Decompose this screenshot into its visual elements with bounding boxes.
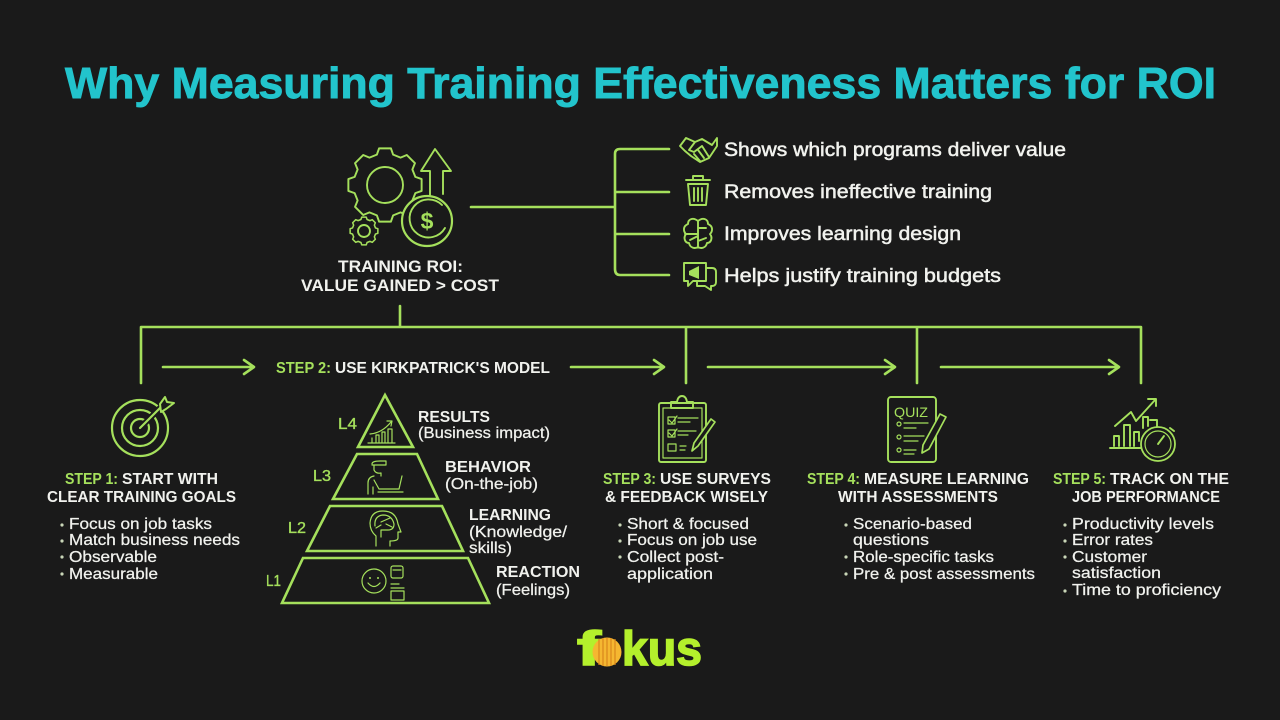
bullet list: Short & focused bbox=[627, 516, 749, 533]
heading: TRACK ON THE bbox=[1110, 471, 1229, 488]
bullet list: Productivity levels bbox=[1072, 516, 1214, 533]
benefit: programs deliver value: Shows which programs deliver value bbox=[724, 140, 1066, 161]
level 2: learning: (Knowledge/ bbox=[469, 524, 568, 541]
level 1: reaction bbox=[266, 558, 580, 603]
panel: step 4 bbox=[807, 397, 1035, 583]
level 2: learning: skills) bbox=[469, 540, 512, 557]
heading: USE SURVEYS bbox=[660, 471, 771, 488]
level 3: behavior: (On-the-job) bbox=[445, 476, 538, 493]
arrow: step 3 to step 4 bbox=[708, 360, 895, 374]
heading: STEP 5: bbox=[1053, 471, 1106, 488]
level 1: reaction: REACTION bbox=[496, 564, 580, 581]
panel: step 5 bbox=[1053, 399, 1229, 599]
heading: WITH ASSESSMENTS bbox=[838, 489, 998, 506]
benefit: justify budgets: Helps justify training budgets bbox=[724, 266, 1001, 287]
bullet list: application bbox=[627, 566, 713, 583]
bullet list: Error rates bbox=[1072, 532, 1153, 549]
bullet list: Scenario-based bbox=[853, 516, 972, 533]
benefit: learning design: Improves learning design bbox=[724, 224, 961, 245]
benefit: removes training bbox=[686, 176, 992, 205]
step 2 heading: USE KIRKPATRICK'S MODEL bbox=[335, 360, 550, 377]
connector: steps bus bbox=[141, 306, 1141, 383]
ROI label: TRAINING ROI: bbox=[338, 257, 463, 276]
arrow: step 1 to step 2 bbox=[163, 360, 254, 374]
level 3: behavior: BEHAVIOR bbox=[445, 459, 531, 476]
icon: gears, arrow and coin bbox=[348, 148, 452, 246]
level 4: results: L4 bbox=[338, 416, 357, 433]
bullet list: Customer bbox=[1072, 549, 1148, 566]
heading: JOB PERFORMANCE bbox=[1072, 489, 1220, 506]
arrow: step 4 to step 5 bbox=[941, 360, 1119, 374]
heading bbox=[47, 471, 236, 506]
bullet list: Focus on job use bbox=[627, 532, 757, 549]
bullet list bbox=[844, 516, 1035, 583]
panel: training ROI bbox=[301, 148, 500, 295]
ROI label bbox=[301, 257, 500, 295]
bullet list: satisfaction bbox=[1072, 565, 1161, 582]
bullet list bbox=[1063, 516, 1221, 599]
level 3: behavior: L3 bbox=[313, 468, 331, 485]
level 1: reaction: (Feelings) bbox=[496, 582, 570, 599]
heading: START WITH bbox=[122, 471, 218, 488]
level 4: results: RESULTS bbox=[418, 409, 490, 426]
heading bbox=[1053, 471, 1229, 506]
heading bbox=[603, 471, 771, 506]
ROI label: VALUE GAINED > COST bbox=[301, 276, 500, 295]
heading: & FEEDBACK WISELY bbox=[605, 489, 769, 506]
bullet list: Focus on job tasks bbox=[69, 516, 212, 533]
title: Why Measuring Training Effectiveness Matters for ROI bbox=[65, 59, 1216, 108]
icon: quiz sheet and pencil: QUIZ bbox=[894, 404, 928, 420]
level 1: reaction: L1 bbox=[266, 573, 281, 590]
bullet list: Pre & post assessments bbox=[853, 566, 1035, 583]
icon: clipboard checklist bbox=[659, 396, 715, 462]
heading: MEASURE LEARNING bbox=[864, 471, 1029, 488]
panel: Kirkpatrick pyramid bbox=[266, 395, 580, 603]
level 2: learning bbox=[288, 506, 568, 557]
benefit: removes training: Removes ineffective training bbox=[724, 182, 992, 203]
icon: quiz sheet and pencil bbox=[888, 397, 946, 462]
icon: person at laptop bbox=[368, 461, 403, 494]
bullet list bbox=[618, 516, 757, 583]
benefit: programs deliver value bbox=[680, 138, 1066, 162]
logo: fokus: o bbox=[594, 632, 620, 673]
icon: handshake bbox=[680, 138, 717, 162]
arrow: step 2 to step 3 bbox=[571, 360, 664, 374]
level 4: results bbox=[338, 395, 550, 447]
bullet list: questions bbox=[853, 532, 929, 549]
level 2: learning: L2 bbox=[288, 520, 306, 537]
bullet list: Collect post- bbox=[627, 549, 724, 566]
icon: rising bar chart bbox=[368, 421, 395, 443]
bullet list: Time to proficiency bbox=[1072, 582, 1221, 599]
icon: brain bbox=[684, 219, 712, 248]
panel: step 3 bbox=[603, 396, 771, 583]
connector: ROI to benefits bbox=[471, 149, 669, 275]
icon: gears, arrow and coin: $ bbox=[421, 208, 434, 234]
level 2: learning: LEARNING bbox=[469, 507, 551, 524]
icon: speech bubbles with megaphone bbox=[684, 263, 716, 290]
logo: fokus: f bbox=[577, 623, 603, 676]
icon: trash can bbox=[686, 176, 710, 205]
bullet list bbox=[60, 516, 240, 583]
heading: STEP 3: bbox=[603, 471, 656, 488]
level 3: behavior bbox=[313, 454, 538, 499]
heading: STEP 4: bbox=[807, 471, 860, 488]
panel: step 1 bbox=[47, 397, 240, 583]
bullet list: Observable bbox=[69, 549, 157, 566]
heading: STEP 1: bbox=[65, 471, 118, 488]
benefit: learning design bbox=[684, 219, 961, 248]
level 4: results: (Business impact) bbox=[418, 425, 550, 442]
icon: performance chart and stopwatch bbox=[1110, 399, 1175, 461]
bullet list: Match business needs bbox=[69, 532, 240, 549]
icon: target with arrow bbox=[112, 397, 174, 456]
heading bbox=[807, 471, 1029, 506]
step 2 heading: STEP 2: bbox=[276, 360, 331, 377]
panel: benefits bbox=[680, 138, 1066, 290]
benefit: justify budgets bbox=[684, 263, 1001, 290]
icon: smiley and feedback cards bbox=[362, 566, 404, 600]
heading: CLEAR TRAINING GOALS bbox=[47, 489, 236, 506]
logo: fokus bbox=[577, 623, 702, 676]
icon: head with brain bbox=[370, 511, 401, 546]
logo: fokus: kus bbox=[622, 623, 702, 676]
bullet list: Role-specific tasks bbox=[853, 549, 994, 566]
bullet list: Measurable bbox=[69, 566, 158, 583]
